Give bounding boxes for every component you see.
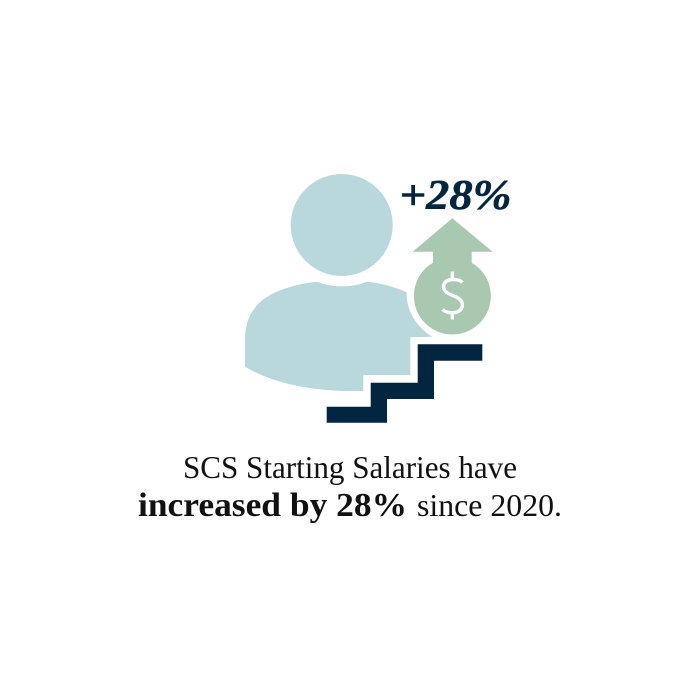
caption line 2 bold: increased by 28% [138, 487, 407, 524]
caption line 1: SCS Starting Salaries have [183, 449, 517, 485]
icon: stairs [327, 344, 482, 423]
icon: person [245, 174, 432, 391]
caption line 2 regular: since 2020. [417, 487, 562, 523]
caption [138, 449, 562, 524]
icon: money arrow [413, 218, 493, 334]
label: +28%: +28% [400, 173, 512, 219]
icon: dollar sign [442, 272, 462, 320]
